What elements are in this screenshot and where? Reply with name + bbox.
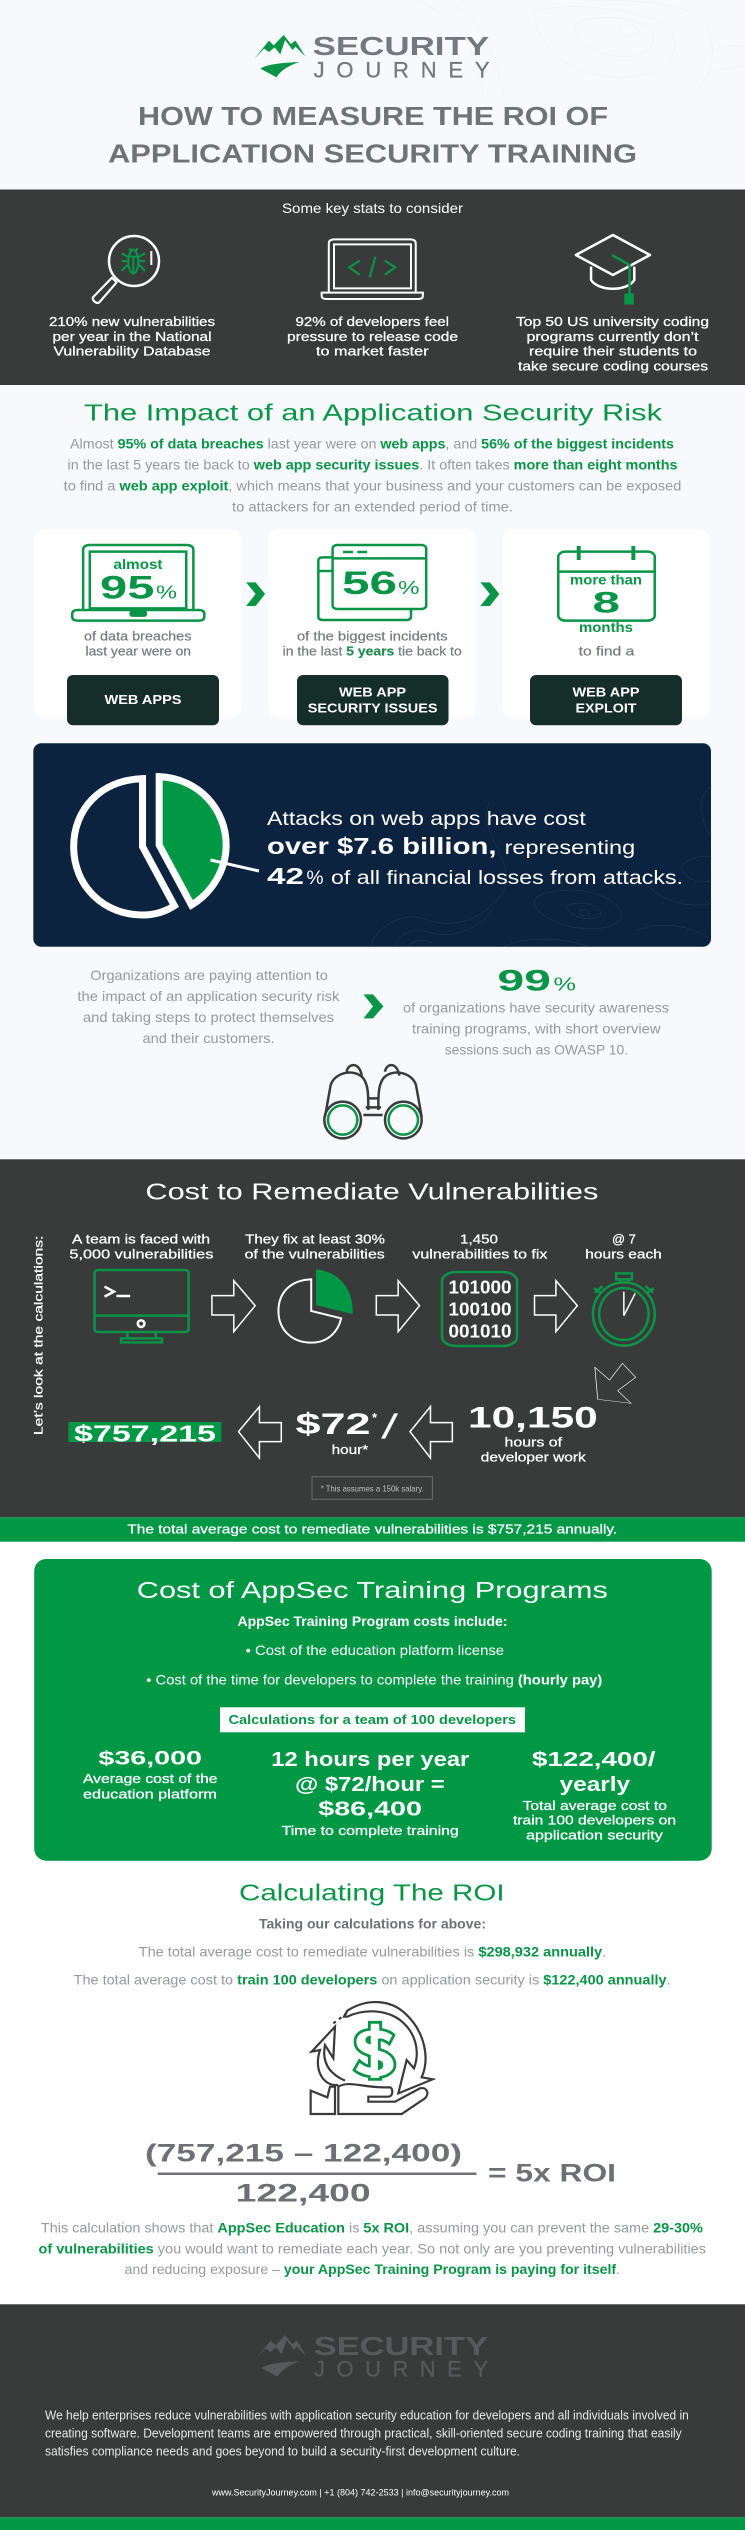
list of costs: • Cost of the education platform license bbox=[246, 1642, 504, 1658]
note: salary assumption: * This assumes a 150k salary. bbox=[321, 1484, 424, 1494]
icon: footer mountains bbox=[257, 2335, 306, 2377]
chart: pie 42 percent bbox=[74, 777, 259, 915]
button: security issues: WEB APP bbox=[339, 686, 406, 700]
stat: 210 percent bbox=[49, 315, 215, 358]
text: roi inputs: The total average cost to remediate vulnerabilities is $298,932 annually . bbox=[139, 1943, 606, 1959]
icon: money in hand bbox=[311, 2002, 433, 2114]
stat: almost 95% bbox=[100, 556, 177, 605]
text: security awareness: sessions such as OWASP 10. bbox=[445, 1041, 628, 1057]
impact paragraph bbox=[64, 435, 681, 514]
column: total yearly bbox=[513, 1749, 676, 1842]
impact paragraph: in the last 5 years tie back to web app security issues . It often takes more than eight months bbox=[68, 456, 678, 472]
panel: exploit card bbox=[502, 529, 710, 725]
contact line: www.SecurityJourney.com | +1 (804) 742-2533 | info@securityjourney.com bbox=[211, 2487, 509, 2498]
title bbox=[108, 103, 637, 169]
text: roi conclusion bbox=[38, 2219, 706, 2277]
callout text: of all financial losses from attacks. bbox=[331, 867, 683, 889]
column: training time bbox=[271, 1749, 470, 1838]
binary digits: 001010 bbox=[448, 1321, 512, 1342]
column: total yearly: Total average cost to bbox=[523, 1799, 667, 1813]
heading: Cost of AppSec Training Programs bbox=[137, 1577, 608, 1603]
arrow: chevron two bbox=[480, 582, 499, 606]
stat: 56% bbox=[342, 565, 420, 601]
column: training time: Time to complete training bbox=[282, 1824, 459, 1838]
stat: 210 percent: per year in the National bbox=[52, 330, 212, 344]
column: training time: 12 hours per year bbox=[271, 1749, 470, 1771]
caption: in the last 5 years tie back to bbox=[283, 645, 462, 659]
total: $757,215 bbox=[68, 1421, 221, 1447]
stat: $72 per hour: $72 bbox=[296, 1408, 370, 1441]
text: organizations paying attention: and their customers. bbox=[142, 1030, 274, 1046]
panel: key stats bbox=[0, 190, 745, 385]
arrow: chevron three bbox=[363, 994, 383, 1018]
list of costs bbox=[146, 1613, 602, 1687]
stat: top 50: programs currently don’t bbox=[526, 330, 699, 344]
arrow: left arrows bbox=[239, 1407, 452, 1458]
note: salary assumption bbox=[312, 1477, 432, 1499]
panel: footer bbox=[0, 2304, 745, 2517]
stat: 210 percent: 210% new vulnerabilities bbox=[49, 315, 215, 329]
text: roi inputs bbox=[74, 1915, 671, 1987]
title: APPLICATION SECURITY TRAINING bbox=[108, 141, 637, 169]
button: web apps bbox=[67, 675, 219, 725]
text: organizations paying attention: the impact of an application security risk bbox=[77, 988, 340, 1004]
binary digits bbox=[448, 1276, 512, 1342]
formula: roi bbox=[145, 2140, 616, 2208]
button: security issues bbox=[297, 675, 448, 725]
callout text: Attacks on web apps have cost bbox=[267, 808, 586, 830]
step captions: A team is faced with bbox=[72, 1232, 210, 1246]
step captions: They fix at least 30% bbox=[245, 1232, 385, 1246]
stat: 56%: % bbox=[398, 578, 420, 598]
text: organizations paying attention: and taking steps to protect themselves bbox=[83, 1009, 334, 1025]
stat: 56%: 56 bbox=[342, 565, 397, 601]
label: team of 100: Calculations for a team of 100 developers bbox=[228, 1713, 516, 1727]
text: roi inputs: The total average cost to train 100 developers on application security is $122,400 annually . bbox=[74, 1971, 671, 1987]
stat: $72 per hour: / bbox=[378, 1408, 401, 1446]
stat: more than 8 months: 8 bbox=[592, 587, 620, 620]
vertical label: Let’s look at the calculations: bbox=[32, 1236, 46, 1435]
stat: 99 percent: 99 bbox=[497, 965, 551, 998]
formula: roi: = 5x ROI bbox=[488, 2160, 616, 2188]
title: HOW TO MEASURE THE ROI OF bbox=[138, 103, 608, 131]
icon: laptop code bbox=[322, 239, 423, 299]
total: $757,215: $757,215 bbox=[74, 1421, 216, 1447]
panel: security issues card bbox=[268, 529, 476, 725]
text: organizations paying attention bbox=[77, 967, 340, 1046]
impact paragraph: to find a web app exploit , which means that your business and your customers can be exposed bbox=[64, 477, 681, 493]
heading: Cost to Remediate Vulnerabilities bbox=[145, 1178, 598, 1204]
step captions: vulnerabilities to fix bbox=[412, 1248, 548, 1262]
label: team of 100 bbox=[220, 1707, 525, 1732]
heading: impact: The Impact of an Application Security Risk bbox=[84, 400, 663, 426]
chart: pie 30 percent bbox=[278, 1269, 353, 1343]
text: roi inputs: Taking our calculations for above: bbox=[259, 1915, 486, 1931]
step captions: 1,450 bbox=[460, 1232, 498, 1246]
icon: calendar bbox=[558, 546, 655, 621]
arrow: down left bbox=[595, 1363, 636, 1403]
about text: satisfies compliance needs and goes beyond to build a security-first development culture. bbox=[45, 2443, 520, 2458]
footer wordmark bbox=[314, 2333, 488, 2382]
footer wordmark: SECURITY bbox=[314, 2333, 488, 2361]
stat: 92 percent: to market faster bbox=[316, 344, 429, 358]
banner: total remediation cost: The total average cost to remediate vulnerabilities is $757,215 annually. bbox=[127, 1522, 617, 1536]
stat: almost 95%: % bbox=[156, 582, 177, 602]
key stats heading: Some key stats to consider bbox=[282, 200, 463, 216]
stat: top 50: Top 50 US university coding bbox=[516, 315, 709, 329]
stat: 10,150 hours: 10,150 bbox=[468, 1401, 598, 1434]
list of costs: • Cost of the time for developers to complete the training (hourly pay) bbox=[146, 1671, 602, 1687]
footer band bbox=[0, 2517, 745, 2530]
stat: 92 percent bbox=[287, 315, 458, 358]
text: roi conclusion: of vulnerabilities you would want to remediate each year. So not only are you preventing vulnerabilities bbox=[38, 2240, 706, 2256]
column: training time: @ $72/hour = bbox=[295, 1774, 445, 1796]
text: security awareness: training programs, with short overview bbox=[412, 1020, 661, 1036]
arrow: step arrows right bbox=[212, 1281, 577, 1332]
heading: calculating the roi: Calculating The ROI bbox=[239, 1880, 505, 1906]
step captions bbox=[69, 1232, 662, 1262]
caption: last year were on bbox=[86, 645, 191, 659]
column: total yearly: train 100 developers on bbox=[513, 1814, 676, 1828]
logo wordmark bbox=[313, 33, 490, 82]
about text: creating software. Development teams are empowered through practical, skill-oriented secure coding training that easily bbox=[45, 2426, 682, 2441]
icon: graduation cap bbox=[576, 235, 650, 304]
icon: monitor bbox=[95, 1270, 189, 1342]
formula: roi: (757,215 – 122,400) bbox=[145, 2140, 462, 2168]
caption: of the biggest incidents bbox=[297, 630, 448, 644]
impact paragraph: Almost 95% of data breaches last year were on web apps, and 56% of the biggest incidents bbox=[70, 435, 674, 451]
text: organizations paying attention: Organizations are paying attention to bbox=[90, 967, 328, 983]
column: platform cost: Average cost of the bbox=[83, 1772, 218, 1786]
icon: browser windows bbox=[318, 545, 426, 620]
caption: to find a bbox=[579, 645, 634, 659]
panel: financial losses bbox=[33, 743, 711, 947]
button: exploit bbox=[530, 675, 682, 725]
binary digits: 100100 bbox=[448, 1298, 512, 1319]
button: exploit: EXPLOIT bbox=[576, 701, 637, 715]
impact paragraph: to attackers for an extended period of time. bbox=[232, 498, 513, 514]
column: platform cost: $36,000 bbox=[98, 1749, 202, 1770]
button: security issues: SECURITY ISSUES bbox=[308, 701, 438, 715]
header section bbox=[108, 0, 745, 169]
button: exploit: WEB APP bbox=[572, 686, 640, 700]
stat: more than 8 months bbox=[570, 572, 642, 635]
column: platform cost bbox=[83, 1749, 218, 1801]
step captions: of the vulnerabilities bbox=[245, 1248, 385, 1262]
icon: magnifier with bug bbox=[93, 236, 159, 303]
banner: total remediation cost bbox=[0, 1517, 745, 1542]
icon: laptop bbox=[72, 545, 204, 621]
callout text: % bbox=[306, 868, 324, 889]
icon: binoculars bbox=[324, 1065, 422, 1138]
callout text bbox=[267, 808, 683, 889]
stat: almost 95%: almost bbox=[114, 556, 163, 572]
panel: web apps card bbox=[34, 529, 242, 725]
callout text: 42 bbox=[267, 863, 304, 889]
stat: 99 percent: % bbox=[554, 975, 576, 995]
stat: top 50: take secure coding courses bbox=[518, 360, 708, 374]
stat: $72 per hour bbox=[296, 1408, 401, 1457]
about text bbox=[45, 2407, 689, 2458]
step captions: hours each bbox=[585, 1248, 662, 1262]
text: security awareness bbox=[403, 999, 669, 1057]
step captions: @ 7 bbox=[612, 1232, 636, 1246]
column: total yearly: $122,400/ bbox=[532, 1749, 656, 1771]
icon: logo mountains bbox=[255, 35, 306, 77]
text: roi conclusion: This calculation shows that AppSec Education is 5x ROI, assuming you can prevent the same 29-30% bbox=[41, 2219, 703, 2235]
stat: more than 8 months: months bbox=[579, 620, 633, 635]
column: total yearly: application security bbox=[526, 1828, 664, 1842]
binary digits: 101000 bbox=[448, 1276, 512, 1297]
caption: of data breaches bbox=[84, 630, 191, 644]
about text: We help enterprises reduce vulnerabilities with application security education for developers and all individuals involved in bbox=[45, 2407, 689, 2422]
footer logo bbox=[257, 2333, 488, 2382]
stat: top 50: require their students to bbox=[529, 344, 697, 358]
column: total yearly: yearly bbox=[560, 1774, 631, 1796]
stat: 92 percent: 92% of developers feel bbox=[296, 315, 449, 329]
stat: 92 percent: pressure to release code bbox=[287, 330, 458, 344]
logo wordmark: SECURITY bbox=[313, 33, 489, 61]
stat: 10,150 hours: developer work bbox=[481, 1450, 587, 1464]
stat: top 50 bbox=[516, 315, 709, 374]
stat: 210 percent: Vulnerability Database bbox=[54, 344, 211, 358]
panel: cost of appsec training bbox=[34, 1559, 712, 1861]
stat: $72 per hour: * bbox=[372, 1410, 378, 1425]
text: roi conclusion: and reducing exposure – your AppSec Training Program is paying for itself. bbox=[124, 2261, 620, 2277]
button: web apps: WEB APPS bbox=[104, 693, 182, 707]
stat: 10,150 hours bbox=[468, 1401, 598, 1464]
stat: almost 95%: 95 bbox=[100, 569, 154, 605]
icon: stopwatch bbox=[593, 1273, 655, 1346]
stat: 99 percent bbox=[497, 965, 576, 998]
logo bbox=[255, 33, 490, 82]
arrow: chevron one bbox=[246, 582, 265, 606]
icon: binary code bbox=[442, 1272, 517, 1346]
step captions: 5,000 vulnerabilities bbox=[69, 1248, 213, 1262]
stat: 10,150 hours: hours of bbox=[504, 1435, 563, 1449]
callout text: representing bbox=[505, 837, 635, 859]
panel: cost to remediate bbox=[0, 1159, 745, 1517]
list of costs: AppSec Training Program costs include: bbox=[238, 1613, 508, 1629]
text: security awareness: of organizations have security awareness bbox=[403, 999, 669, 1015]
formula: roi: 122,400 bbox=[236, 2180, 371, 2208]
stat: more than 8 months: more than bbox=[570, 572, 642, 587]
callout text: over $7.6 billion, bbox=[267, 833, 496, 859]
caption bbox=[84, 630, 191, 659]
stat: $72 per hour: hour* bbox=[332, 1443, 368, 1457]
logo wordmark: JOURNEY bbox=[314, 58, 490, 82]
column: platform cost: education platform bbox=[83, 1787, 217, 1801]
column: training time: $86,400 bbox=[318, 1799, 422, 1821]
caption bbox=[283, 630, 462, 659]
footer wordmark: JOURNEY bbox=[314, 2357, 488, 2382]
